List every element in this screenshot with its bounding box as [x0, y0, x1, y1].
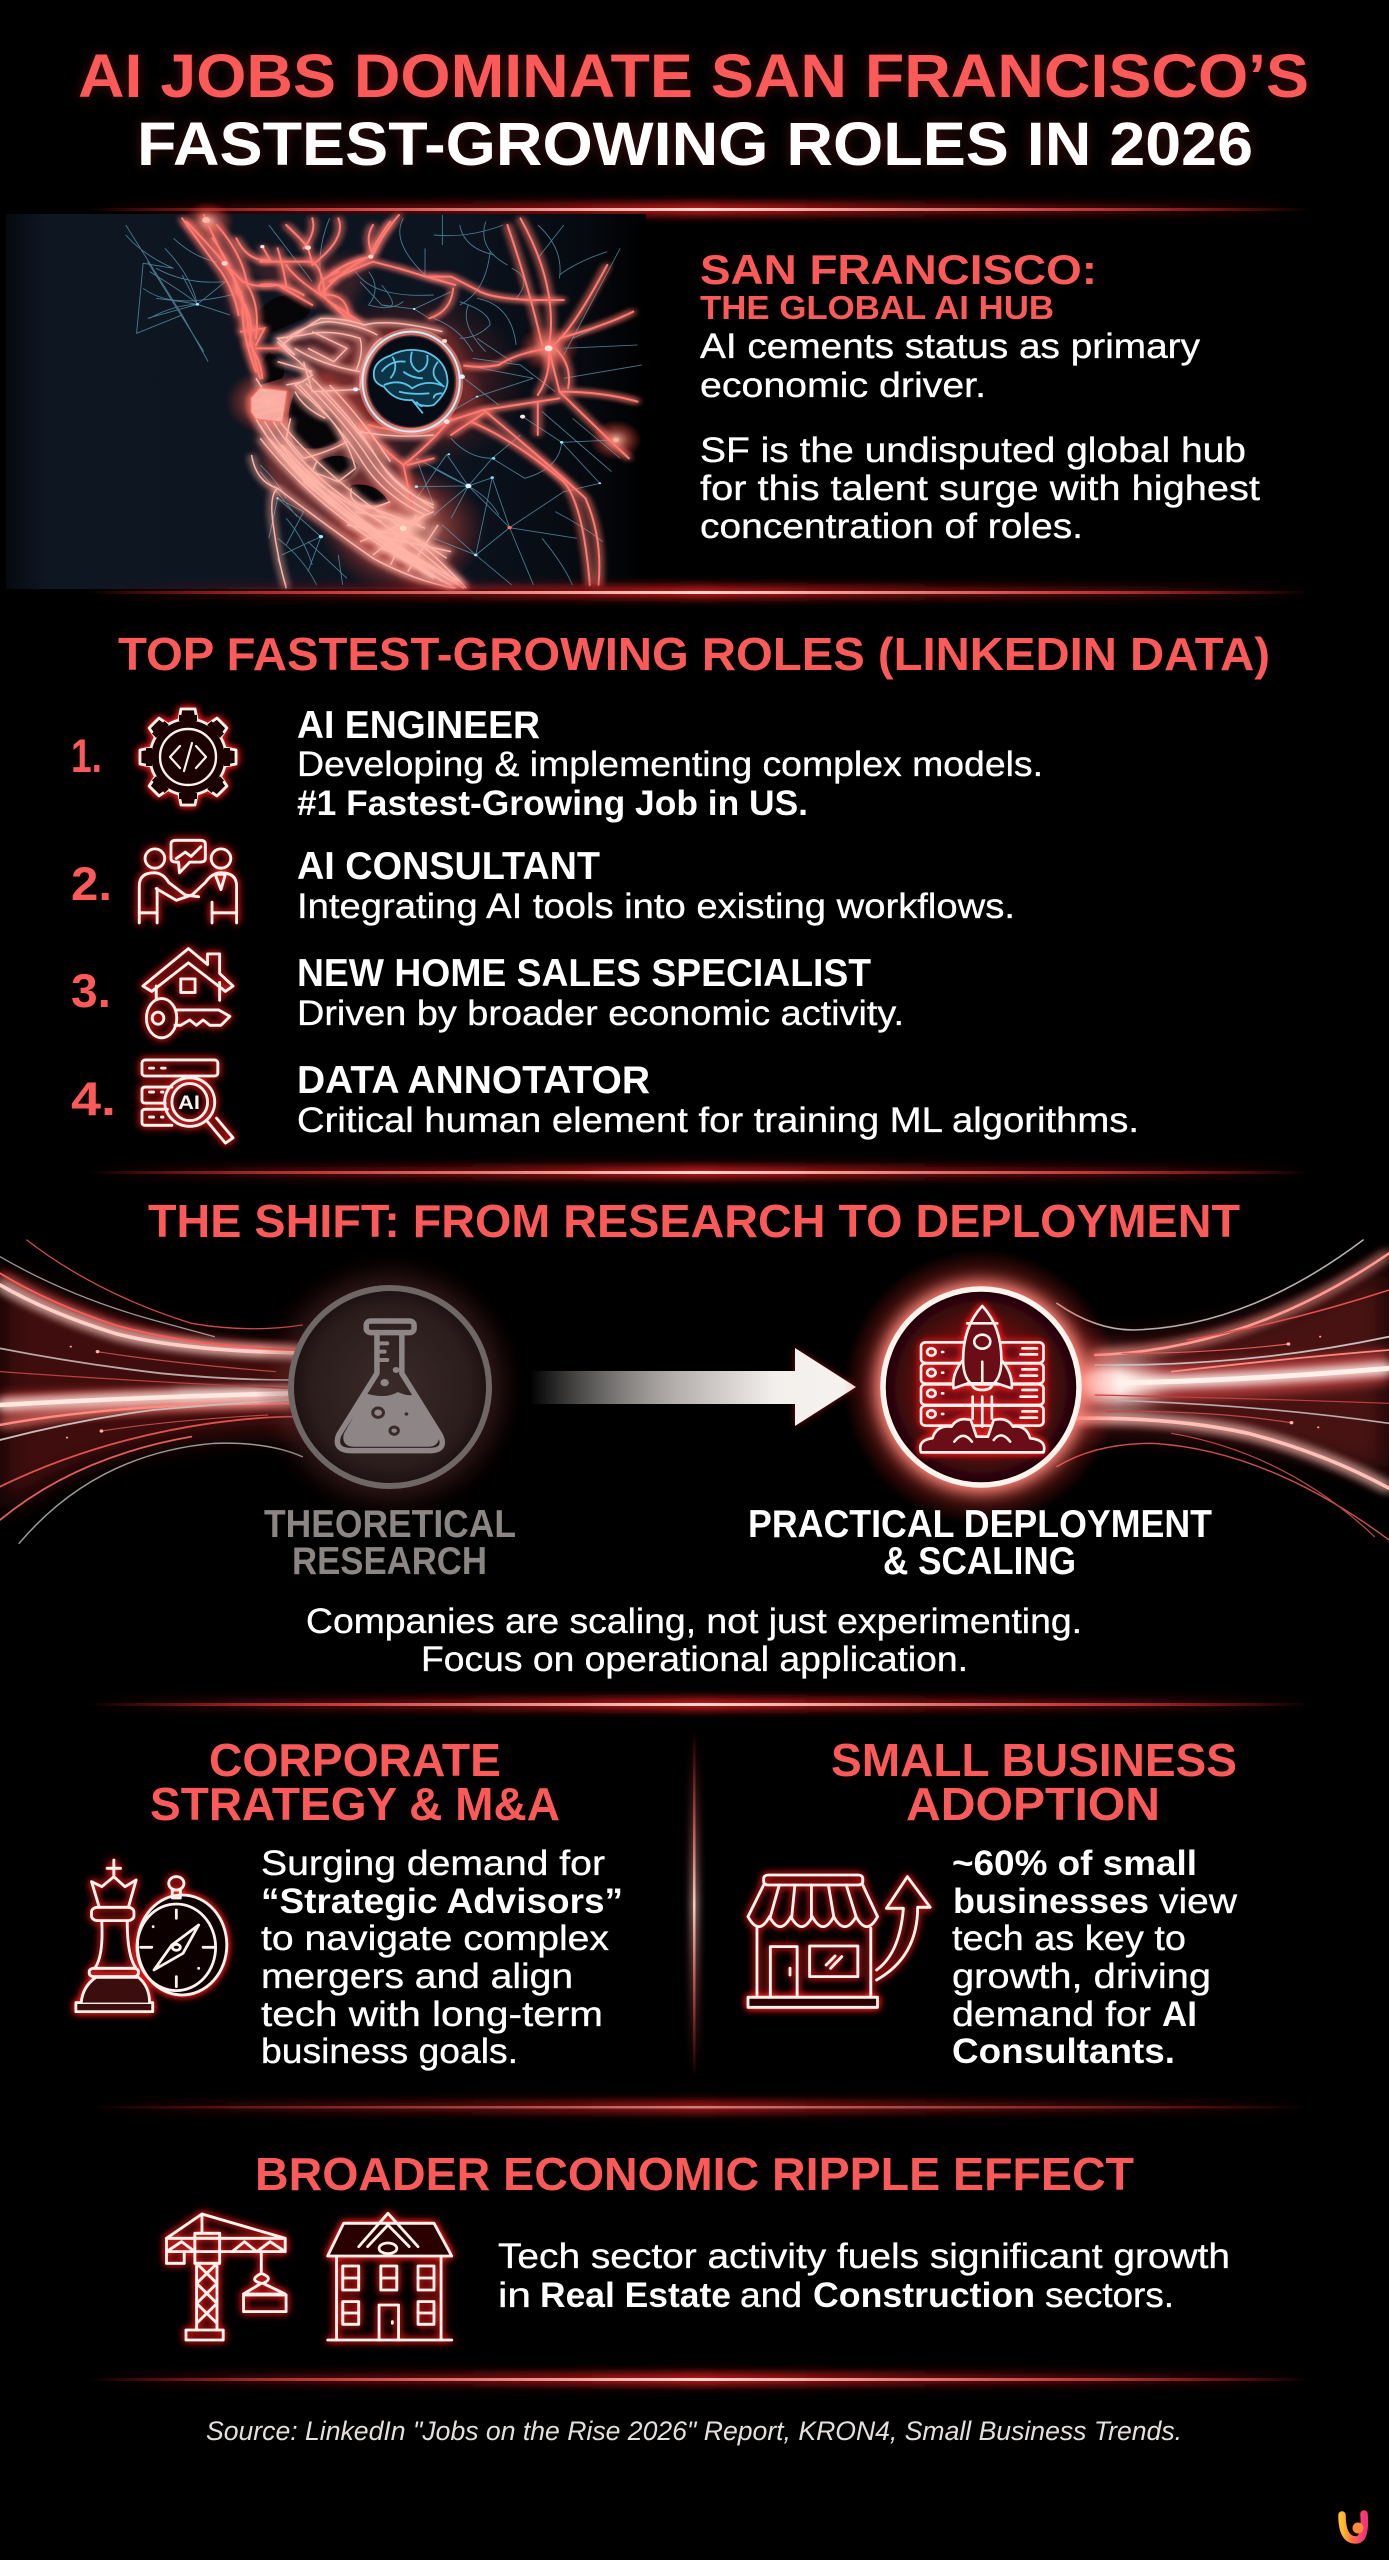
text: small business stats: ~60% of small	[952, 1843, 1197, 1883]
text: small business stats: demand for	[952, 1994, 1151, 2034]
heading: small business: SMALL BUSINESS	[831, 1734, 1237, 1786]
text: strategic advisors: mergers and align	[261, 1956, 573, 1996]
text: small business stats: AI	[1162, 1994, 1197, 2034]
heading: corporate strategy: CORPORATE	[209, 1734, 501, 1786]
text: strategic advisors: tech with long-term	[261, 1994, 603, 2034]
map illustration: bay area network with brain	[6, 202, 646, 593]
role text: Integrating AI tools into existing workflows.	[297, 886, 1015, 926]
text: strategic advisors: business goals.	[261, 2031, 518, 2071]
heading: small business	[831, 1734, 1237, 1830]
network nodes	[196, 217, 619, 556]
role text: #1 Fastest-Growing Job in US.	[297, 783, 808, 823]
text: companies are scaling	[306, 1601, 1082, 1679]
label: practical deployment and scaling	[748, 1503, 1212, 1583]
label: practical deployment and scaling: PRACTICAL DEPLOYMENT	[748, 1503, 1212, 1546]
role text: Driven by broader economic activity.	[297, 993, 904, 1033]
text: hub description: SF is the undisputed global hub	[700, 430, 1246, 470]
role 1: AI engineer	[71, 704, 1043, 823]
icon: flask circle (theoretical research)	[255, 1252, 525, 1522]
panel: corporate strategy and M&A	[76, 1734, 623, 2071]
source note: Source: LinkedIn "Jobs on the Rise 2026" Report, KRON4, Small Business Trends.	[206, 2416, 1182, 2446]
title	[78, 42, 1309, 178]
brain ring	[363, 332, 460, 432]
role text: Critical human element for training ML algorithms.	[297, 1100, 1139, 1140]
heading: ripple effect: BROADER ECONOMIC RIPPLE EFFECT	[255, 2148, 1134, 2200]
light streaks left	[0, 1240, 337, 1543]
text: strategic advisors: to navigate complex	[261, 1918, 609, 1958]
heading: corporate strategy	[150, 1734, 560, 1830]
panel: broader economic ripple effect	[167, 2148, 1230, 2340]
role text: AI CONSULTANT	[297, 845, 600, 888]
role text	[297, 952, 904, 1033]
heading: corporate strategy: STRATEGY & M&A	[150, 1778, 560, 1830]
dark bay areas	[257, 295, 388, 505]
text: ripple description: Real Estate	[540, 2275, 731, 2315]
number 2: 2.	[71, 857, 112, 910]
text: ripple description	[498, 2236, 1230, 2315]
panel: small business adoption	[748, 1734, 1237, 2071]
icon: house and key	[143, 949, 233, 1038]
text: ripple description: and	[740, 2275, 802, 2315]
role 2: AI consultant	[71, 840, 1015, 926]
text: hub description: concentration of roles.	[700, 506, 1083, 546]
text: hub description: economic driver.	[700, 365, 986, 405]
heading: the shift: THE SHIFT: FROM RESEARCH TO DEPLOYMENT	[148, 1195, 1240, 1247]
label: theoretical research: THEORETICAL	[264, 1503, 516, 1546]
text: small business stats: businesses	[953, 1881, 1149, 1921]
text: hub description: for this talent surge with highest	[700, 468, 1260, 508]
text: strategic advisors: “Strategic Advisors”	[261, 1881, 623, 1921]
panel: top fastest-growing roles	[71, 628, 1270, 1143]
role 4: data annotator	[71, 1059, 1139, 1143]
heading: san francisco hub	[700, 246, 1097, 327]
icon: gear with code	[140, 709, 236, 805]
text: strategic advisors: Surging demand for	[261, 1843, 605, 1883]
text: small business stats	[952, 1843, 1237, 2071]
icon label: AI: AI	[178, 1093, 200, 1114]
icon: consultants handshake	[139, 840, 237, 923]
label: theoretical research	[264, 1503, 516, 1583]
icon: construction crane	[167, 2214, 286, 2340]
role text: DATA ANNOTATOR	[297, 1059, 650, 1102]
text: small business stats: growth, driving	[952, 1956, 1211, 1996]
icon: brand logo	[1342, 2514, 1364, 2540]
text: companies are scaling: Companies are scaling, not just experimenting.	[306, 1601, 1082, 1641]
text: ripple description: sectors.	[1045, 2275, 1174, 2315]
title: FASTEST-GROWING ROLES IN 2026	[137, 110, 1253, 178]
title: AI JOBS DOMINATE SAN FRANCISCO’S	[78, 42, 1309, 110]
panel: the shift from research to deployment	[0, 1195, 1389, 1679]
text: companies are scaling: Focus on operational application.	[421, 1639, 968, 1679]
text: hub description: AI cements status as primary	[700, 326, 1200, 366]
heading: san francisco hub: THE GLOBAL AI HUB	[700, 290, 1054, 327]
text: small business stats: view	[1159, 1881, 1237, 1921]
heading: san francisco hub: SAN FRANCISCO:	[700, 246, 1097, 293]
number 3: 3.	[71, 964, 111, 1017]
heading: small business: ADOPTION	[906, 1778, 1160, 1830]
text: ripple description: in	[498, 2275, 531, 2315]
role text: NEW HOME SALES SPECIALIST	[297, 952, 871, 995]
role text	[297, 704, 1043, 823]
icon: storefront with growth arrow	[748, 1875, 930, 2007]
heading: top roles: TOP FASTEST-GROWING ROLES (LINKEDIN DATA)	[118, 628, 1270, 680]
light streaks right	[1057, 1240, 1389, 1540]
label: practical deployment and scaling: & SCALING	[883, 1540, 1076, 1583]
text: small business stats: Consultants.	[952, 2031, 1175, 2071]
arrow: research to deployment	[530, 1348, 856, 1426]
SF blob	[252, 388, 286, 422]
text: small business stats: tech as key to	[952, 1918, 1186, 1958]
text: hub description	[700, 326, 1260, 546]
icon: rocket circle (practical deployment)	[843, 1249, 1119, 1525]
role text	[297, 845, 1015, 926]
role text: AI ENGINEER	[297, 704, 540, 747]
role text	[297, 1059, 1139, 1140]
text: ripple description: Tech sector activity fuels significant growth	[498, 2236, 1230, 2276]
text: strategic advisors	[261, 1843, 623, 2071]
role 3: new home sales specialist	[71, 949, 904, 1038]
brain	[374, 350, 448, 413]
role text: Developing & implementing complex models.	[297, 744, 1043, 784]
number 4: 4.	[71, 1072, 116, 1125]
number 1: 1.	[71, 729, 102, 782]
label: theoretical research: RESEARCH	[292, 1540, 487, 1583]
icon: chess king and compass	[76, 1860, 227, 2012]
icon: data server and magnifier	[142, 1060, 233, 1143]
icon: apartment building	[328, 2213, 452, 2340]
text: ripple description: Construction	[813, 2275, 1035, 2315]
panel: san francisco hub	[6, 202, 1260, 593]
